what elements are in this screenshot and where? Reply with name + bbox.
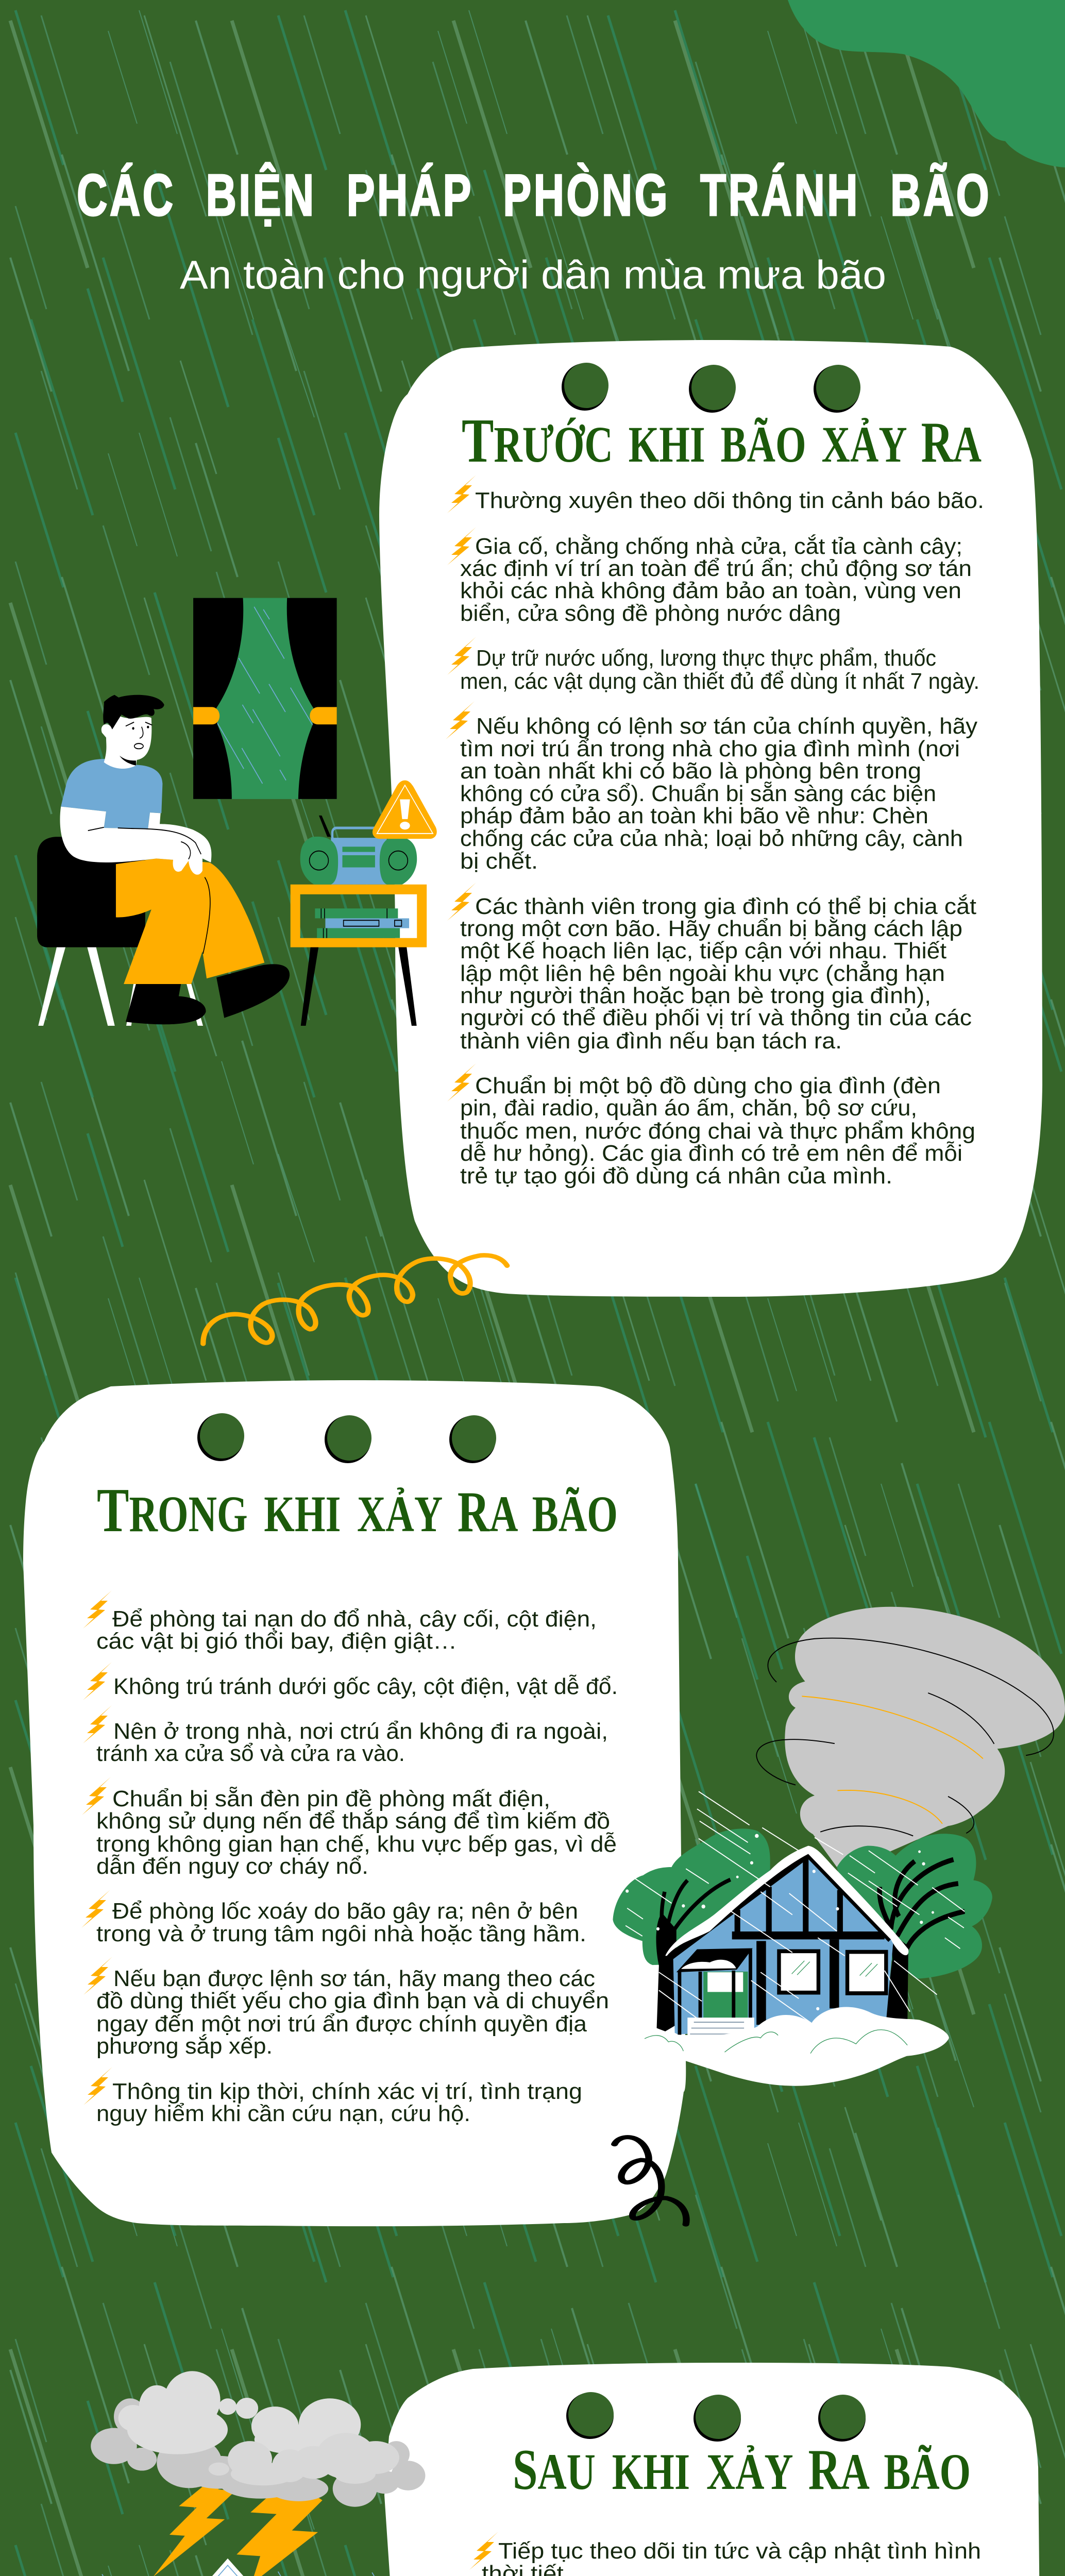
item 1 <box>96 1606 597 1654</box>
ground snow <box>645 2007 949 2086</box>
man <box>60 695 290 1024</box>
storm cloud <box>91 2371 425 2507</box>
item 3: men, các vật dụng cần thiết đủ để dùng ít nhất 7 ngày. <box>460 669 979 694</box>
item 4: bị chết. <box>460 849 538 874</box>
item 5 <box>96 1899 586 1946</box>
panel: during the storm <box>23 1380 686 2226</box>
text block: list <box>81 1590 618 2126</box>
icon: bolt <box>81 1890 110 1928</box>
item 5: Để phòng lốc xoáy do bão gây ra; nên ở bên <box>112 1899 578 1924</box>
tornado <box>756 1607 1065 1867</box>
item 5: thành viên gia đình nếu bạn tách ra. <box>460 1028 842 1054</box>
item 2: Gia cố, chằng chống nhà cửa, cắt tỉa cành cây; <box>475 534 962 559</box>
item 3: Nên ở trong nhà, nơi ctrú ẩn không đi ra ngoài, <box>113 1719 608 1744</box>
item 3: Dự trữ nước uống, lương thực thực phẩm, thuốc <box>476 646 936 671</box>
item 4 <box>96 1786 617 1879</box>
item 2 <box>460 534 972 626</box>
item 6: Chuẩn bị một bộ đồ dùng cho gia đình (đèn <box>475 1073 941 1098</box>
binder holes <box>566 2392 866 2442</box>
item 6: thuốc men, nước đóng chai và thực phẩm không <box>460 1118 975 1144</box>
heading: TRONG KHI XẢY RA BÃO <box>97 1476 618 1545</box>
item 4: không sử dụng nến để thắp sáng để tìm kiếm đồ <box>96 1808 610 1834</box>
item 4: pháp đảm bảo an toàn khi bão về như: Chèn <box>460 803 928 828</box>
icon: bolt <box>82 1777 111 1815</box>
corner blob <box>788 0 1065 167</box>
heading: TRƯỚC KHI BÃO XẢY RA <box>462 406 982 476</box>
lightning bolts <box>153 2481 323 2576</box>
item 5: lập một liên hệ bên ngoài khu vực (chẳng hạn <box>460 960 945 986</box>
item 5: người có thể điều phối vị trí và thông tin của các <box>460 1005 972 1030</box>
snowflakes <box>626 1834 934 2010</box>
item 5: một Kế hoạch liên lạc, tiếp cận với nhau. Thiết <box>460 938 946 963</box>
icon: bolt <box>447 637 476 675</box>
item 4: Chuẩn bị sẵn đèn pin đề phòng mất điện, <box>112 1786 550 1811</box>
item 3 <box>460 646 979 694</box>
icon: bolt <box>83 2067 112 2105</box>
item 4: an toàn nhất khi có bão là phòng bên trong <box>460 758 921 784</box>
item 6: pin, đài radio, quần áo ấm, chăn, bộ sơ cứu, <box>460 1095 917 1121</box>
item 2: khỏi các nhà không đảm bảo an toàn, vùng ven <box>460 578 961 603</box>
item 5 <box>460 894 976 1054</box>
item 4: trong không gian hạn chế, khu vực bếp gas, vì dễ <box>96 1832 617 1857</box>
item 4: chống các cửa của nhà; loại bỏ những cây, cành <box>460 826 963 851</box>
item 4: tìm nơi trú ẩn trong nhà cho gia đình mình (nơi <box>460 736 960 761</box>
item 3: tránh xa cửa sổ và cửa ra vào. <box>96 1741 405 1766</box>
item 1: Để phòng tai nạn do đổ nhà, cây cối, cột điện, <box>112 1606 597 1632</box>
window with curtains <box>193 598 337 799</box>
icon: bolt <box>83 1662 112 1700</box>
icon: bolt <box>447 527 476 565</box>
panel background <box>384 2363 1046 2576</box>
table with books <box>291 885 427 1026</box>
item 7: Thông tin kịp thời, chính xác vị trí, tình trạng <box>112 2079 582 2104</box>
icon: bolt <box>446 701 475 739</box>
item 1: các vật bị gió thổi bay, điện giật… <box>96 1629 457 1654</box>
item 2: xác định ví trí an toàn để trú ẩn; chủ động sơ tán <box>460 556 972 581</box>
item 4: Nếu không có lệnh sơ tán của chính quyền, hãy <box>476 714 977 739</box>
item 4 <box>460 714 977 874</box>
house <box>139 2558 317 2576</box>
subtitle: An toàn cho người dân mùa mưa bão <box>180 252 886 297</box>
item 6 <box>460 1073 975 1189</box>
binder holes <box>562 363 860 413</box>
panel: after the storm <box>384 2363 1046 2576</box>
item 4: không có cửa sổ). Chuẩn bị sẵn sàng các biện <box>460 781 936 806</box>
icon: bolt <box>83 1590 112 1629</box>
binder holes <box>197 1413 496 1463</box>
item 7: nguy hiểm khi cần cứu nạn, cứu hộ. <box>96 2101 470 2126</box>
text block: list <box>469 2532 1005 2576</box>
chair <box>37 837 203 1026</box>
item 6: trẻ tự tạo gói đồ dùng cá nhân của mình. <box>460 1163 892 1189</box>
panel background <box>379 340 1042 1297</box>
trees <box>613 1828 992 2031</box>
item 5: trong và ở trung tâm ngôi nhà hoặc tầng hầm. <box>96 1921 586 1946</box>
icon: bolt <box>83 1957 112 1995</box>
item 7 <box>96 2079 582 2126</box>
squiggle: orange <box>203 1255 507 1344</box>
item 6: Nếu bạn được lệnh sơ tán, hãy mang theo các <box>113 1966 595 1991</box>
item 3 <box>96 1719 608 1766</box>
item 6: đồ dùng thiết yếu cho gia đình bạn và di chuyển <box>96 1988 609 2013</box>
icon: bolt <box>447 475 476 513</box>
falling snow lines <box>626 1791 965 2023</box>
icon: bolt <box>469 2532 498 2570</box>
illustration: flooded house in thunderstorm <box>54 2371 454 2576</box>
item 2: biển, cửa sông đề phòng nước dâng <box>460 601 841 626</box>
heading: SAU KHI XẢY RA BÃO <box>513 2438 971 2502</box>
item 6 <box>96 1966 609 2059</box>
item 6: phương sắp xếp. <box>96 2033 273 2059</box>
item 6: ngay đến một nơi trú ẩn được chính quyền địa <box>96 2011 587 2037</box>
item 4: dẫn đến nguy cơ cháy nổ. <box>96 1854 368 1879</box>
panel: before the storm <box>379 340 1042 1297</box>
icon: warning triangle <box>373 781 437 839</box>
item 1: Thường xuyên theo dõi thông tin cảnh báo bão. <box>475 488 984 513</box>
illustration: tornado and snowy house <box>613 1607 1065 2086</box>
item 5: như người thân hoặc bạn bè trong gia đình), <box>460 983 931 1008</box>
item 1 <box>482 2538 981 2576</box>
illustration: worried man indoors <box>37 598 437 1026</box>
text block: list <box>446 475 984 1189</box>
icon: bolt <box>83 1705 112 1743</box>
rain streaks <box>56 2571 389 2576</box>
house <box>672 1854 894 2041</box>
squiggle: black <box>615 2137 686 2225</box>
item 5: Các thành viên trong gia đình có thể bị chia cắt <box>475 894 976 919</box>
roof snow <box>665 1846 908 1956</box>
icon: bolt <box>447 1063 476 1101</box>
item 1: Tiếp tục theo dõi tin tức và cập nhật tình hình <box>498 2538 981 2564</box>
icon: radio <box>300 816 417 885</box>
icon: bolt <box>447 883 476 921</box>
item 6: dễ hư hỏng). Các gia đình có trẻ em nên để mỗi <box>460 1141 962 1166</box>
item 2: Không trú tránh dưới gốc cây, cột điện, vật dễ đổ. <box>113 1674 618 1699</box>
item 5: trong một cơn bão. Hãy chuẩn bị bằng cách lập <box>460 916 962 941</box>
panel background <box>23 1380 686 2226</box>
